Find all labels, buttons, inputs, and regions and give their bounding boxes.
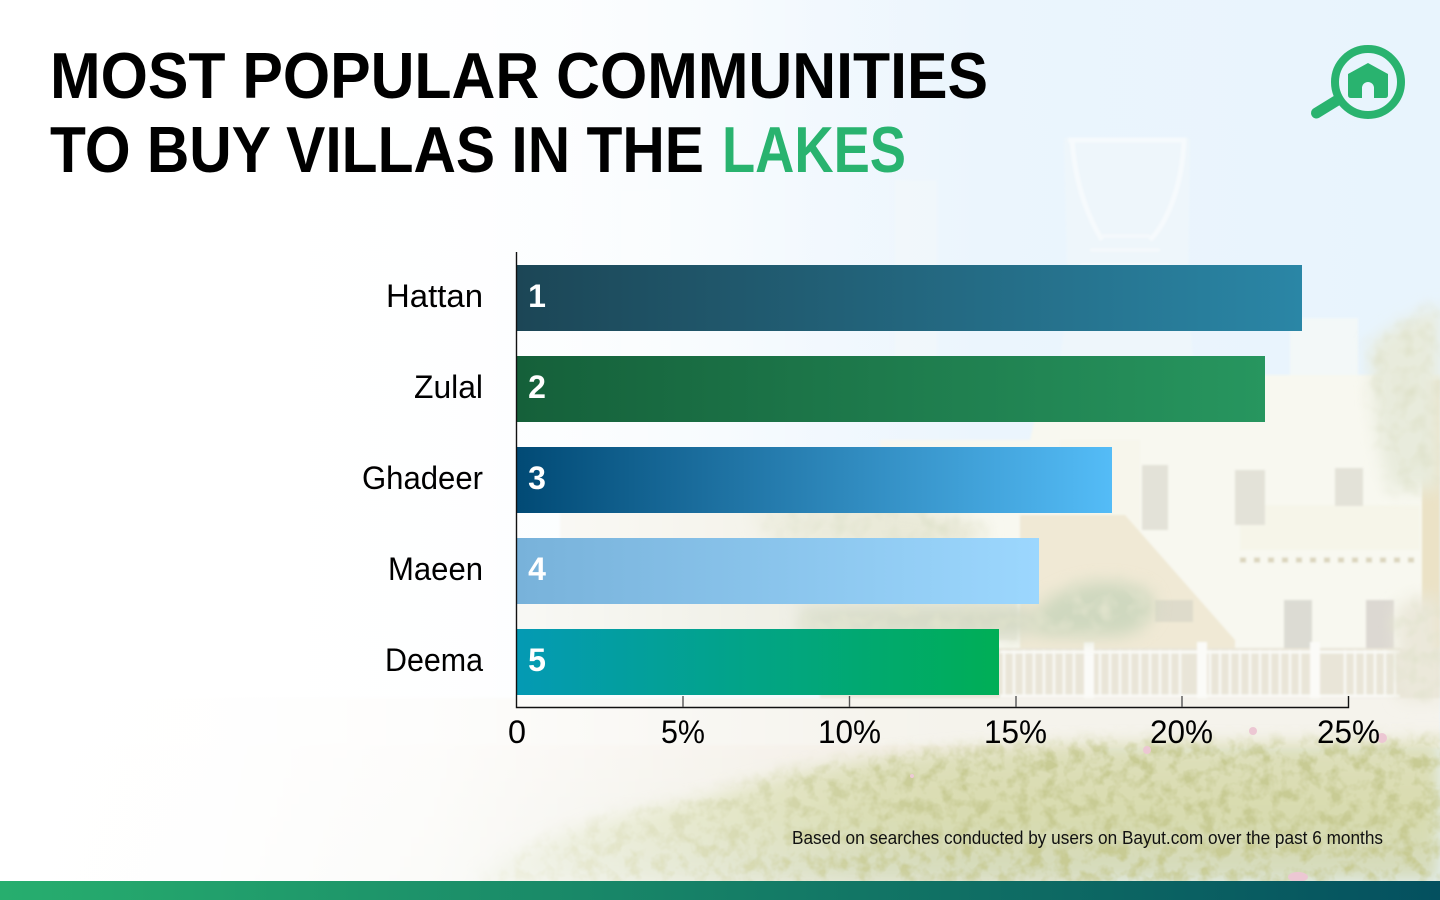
flowers: [910, 727, 1387, 882]
category labels: Zulal: [414, 369, 483, 405]
category labels: [362, 278, 483, 678]
footer bar: [0, 881, 1440, 900]
bar chart: [362, 252, 1380, 750]
bars: [517, 265, 1302, 695]
category labels: Maeen: [388, 551, 483, 587]
distant towers: [1050, 138, 1200, 440]
rank numbers: 5: [528, 642, 546, 678]
title: [50, 39, 988, 186]
footnote: Based on searches conducted by users on Bayut.com over the past 6 months: [792, 828, 1383, 848]
axis labels: 0: [508, 714, 526, 750]
category labels: Hattan: [386, 278, 483, 314]
axis labels: 25%: [1317, 714, 1380, 750]
axis labels: [508, 714, 1380, 750]
strip of lower buildings behind bars: [560, 512, 890, 542]
pavement and water: [0, 698, 1440, 748]
cream villa: [880, 375, 1440, 720]
title highlight: LAKES: [722, 113, 906, 186]
icon: Bayut magnifier house logo: [1316, 49, 1401, 115]
axis labels: 20%: [1150, 714, 1213, 750]
category labels: Ghadeer: [362, 460, 483, 496]
rank numbers: 3: [528, 460, 546, 496]
axis labels: 5%: [661, 714, 705, 750]
rank numbers: [528, 278, 546, 678]
rank numbers: 4: [528, 551, 546, 587]
shrubs and palm: [750, 305, 1440, 700]
category labels: Deema: [385, 642, 483, 678]
rank numbers: 2: [528, 369, 546, 405]
fence: [820, 648, 1440, 698]
title line 1: MOST POPULAR COMMUNITIES: [50, 39, 988, 112]
title line 2: TO BUY VILLAS IN THE: [50, 113, 704, 186]
bushes: [470, 740, 1440, 885]
axis labels: 15%: [984, 714, 1047, 750]
axis labels: 10%: [818, 714, 881, 750]
axes: [516, 252, 1348, 708]
rank numbers: 1: [528, 278, 546, 314]
